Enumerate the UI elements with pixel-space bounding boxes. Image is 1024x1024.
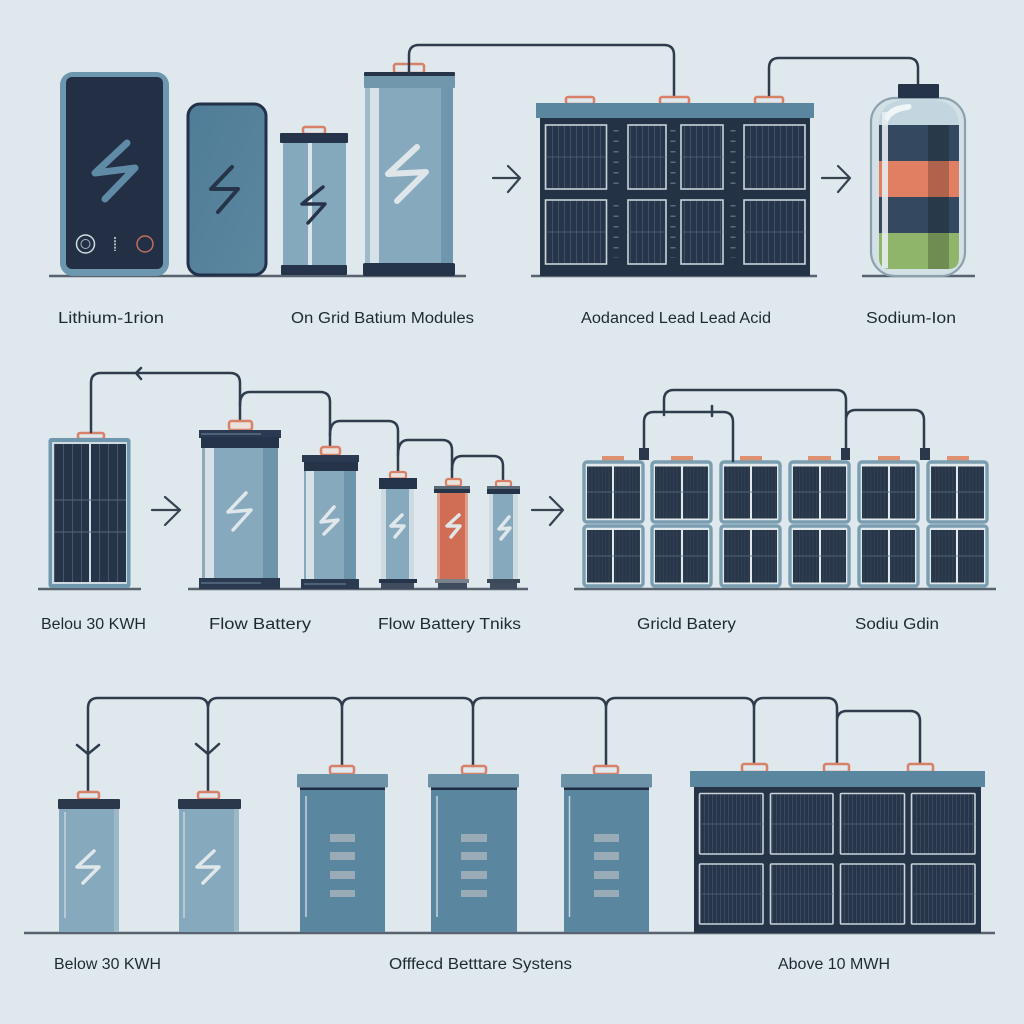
label: Lithium-1rion: Lithium-1rion bbox=[58, 310, 164, 327]
baselines row 1 bbox=[49, 275, 975, 277]
icon: cabinet 2 bbox=[428, 766, 519, 932]
icon: tall blue pack bbox=[188, 104, 266, 275]
icon: module cell bbox=[280, 127, 348, 275]
icon: cabinet 1 bbox=[297, 766, 388, 932]
label: Flow Battery: Flow Battery bbox=[209, 616, 311, 633]
terminal tabs bbox=[602, 456, 969, 461]
icon: flow cell E bbox=[487, 481, 520, 589]
wire: panel to flow battery with arrowhead bbox=[91, 368, 240, 432]
icon: lead acid battery bbox=[536, 97, 814, 276]
wire: cell B to cell C bbox=[330, 421, 398, 471]
label: Aodanced Lead Lead Acid: Aodanced Lead Lead Acid bbox=[581, 310, 771, 327]
icon: cabinet 3 bbox=[561, 766, 652, 932]
icon: single panel bbox=[48, 433, 130, 588]
icon: small cell 1 bbox=[58, 792, 120, 932]
label: Belou 30 KWH: Belou 30 KWH bbox=[41, 616, 146, 633]
label: Gricld Batery: Gricld Batery bbox=[637, 616, 736, 633]
row 2: flow batteries bbox=[38, 368, 996, 633]
arrow: lead acid to sodium-ion bbox=[822, 166, 850, 192]
icon: large module cell bbox=[363, 64, 455, 276]
baselines row 2 bbox=[38, 588, 996, 590]
icon: large MWh battery bbox=[690, 764, 985, 933]
label: Below 30 KWH: Below 30 KWH bbox=[54, 956, 161, 973]
wire: module to lead acid bbox=[409, 45, 674, 96]
label: Flow Battery Tniks: Flow Battery Tniks bbox=[378, 616, 521, 633]
wire: cell A to cell B bbox=[240, 392, 330, 447]
arrow: modules to lead acid bbox=[493, 166, 520, 192]
wires: grid array bbox=[644, 390, 924, 461]
label: Above 10 MWH: Above 10 MWH bbox=[778, 956, 890, 973]
wires: row 3 bus bbox=[77, 698, 920, 792]
icon: lithium device bbox=[60, 72, 169, 276]
arrow: flow batteries to grid battery bbox=[532, 497, 563, 525]
grid battery array bbox=[584, 390, 987, 586]
icon: flow cell C bbox=[379, 472, 417, 589]
wire: lead acid to sodium-ion bbox=[769, 58, 918, 95]
icon: flow cell A bbox=[199, 421, 281, 589]
label: Sodium-Ion: Sodium-Ion bbox=[866, 310, 956, 327]
baseline row 3 bbox=[24, 932, 995, 934]
label: Sodiu Gdin: Sodiu Gdin bbox=[855, 616, 939, 633]
label: On Grid Batium Modules: On Grid Batium Modules bbox=[291, 310, 474, 327]
icon: flow cell D orange bbox=[434, 479, 470, 589]
row 1: battery types bbox=[49, 45, 975, 327]
label: Offfecd Betttare Systens: Offfecd Betttare Systens bbox=[389, 956, 572, 973]
icon: flow cell B bbox=[301, 447, 359, 589]
arrow: panel to flow battery bbox=[152, 497, 180, 525]
icon: sodium-ion jar bbox=[871, 84, 965, 276]
wire: cell D to cell E bbox=[452, 456, 503, 480]
connector blocks bbox=[639, 448, 930, 460]
icon: small cell 2 bbox=[178, 792, 241, 932]
wire: cell C to cell D bbox=[398, 440, 452, 478]
module frames and panes bbox=[584, 462, 987, 586]
row 3: system scale bbox=[24, 698, 995, 973]
